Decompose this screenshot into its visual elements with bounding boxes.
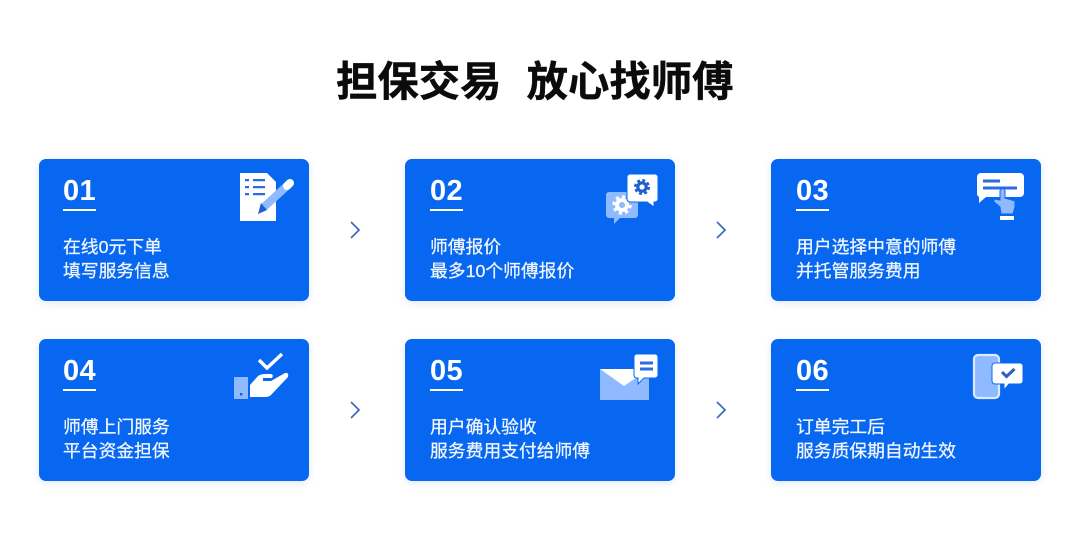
panel: step 02 — [405, 159, 675, 301]
step number 06: 06 — [796, 355, 829, 387]
step 03 text — [796, 237, 956, 281]
icon: speech bubble with pointing hand — [976, 173, 1024, 220]
arrow 2 — [716, 221, 726, 239]
arrow 3 — [350, 401, 360, 419]
icon: document and pen — [240, 173, 294, 221]
step 05 text: 用户确认验收 — [430, 417, 537, 437]
step number 03: 03 — [796, 175, 829, 207]
step 01 text — [63, 237, 170, 281]
step 04 text: 平台资金担保 — [63, 441, 170, 461]
panel: step 01 — [39, 159, 309, 301]
icon: envelope with message — [600, 354, 658, 400]
step 02 text — [430, 237, 574, 281]
step number 01: 01 — [63, 175, 96, 207]
arrow 1 — [350, 221, 360, 239]
step 01 text: 在线0元下单 — [63, 237, 162, 257]
panel: step 05 — [405, 339, 675, 481]
step 06 text: 服务质保期自动生效 — [796, 441, 956, 461]
step 05 text — [430, 417, 590, 461]
icon: phone with check message — [972, 354, 1022, 400]
arrow 4 — [716, 401, 726, 419]
step number 05: 05 — [430, 355, 463, 387]
icon: hand with check mark — [234, 352, 288, 399]
icon: chat bubbles with gears — [606, 174, 658, 224]
step 01 text: 填写服务信息 — [63, 261, 170, 281]
title: 担保交易 放心找师傅 — [336, 59, 734, 105]
step number 04: 04 — [63, 355, 96, 387]
step 03 text: 并托管服务费用 — [796, 261, 920, 281]
step 04 text — [63, 417, 170, 461]
step 02 text: 最多10个师傅报价 — [430, 261, 574, 281]
step 05 text: 服务费用支付给师傅 — [430, 441, 590, 461]
panel: step 03 — [771, 159, 1041, 301]
step number 02: 02 — [430, 175, 463, 207]
panel: step 04 — [39, 339, 309, 481]
step 04 text: 师傅上门服务 — [63, 417, 170, 437]
step 02 text: 师傅报价 — [430, 237, 501, 257]
panel: step 06 — [771, 339, 1041, 481]
step 03 text: 用户选择中意的师傅 — [796, 237, 956, 257]
step 06 text: 订单完工后 — [796, 417, 885, 437]
step 06 text — [796, 417, 956, 461]
